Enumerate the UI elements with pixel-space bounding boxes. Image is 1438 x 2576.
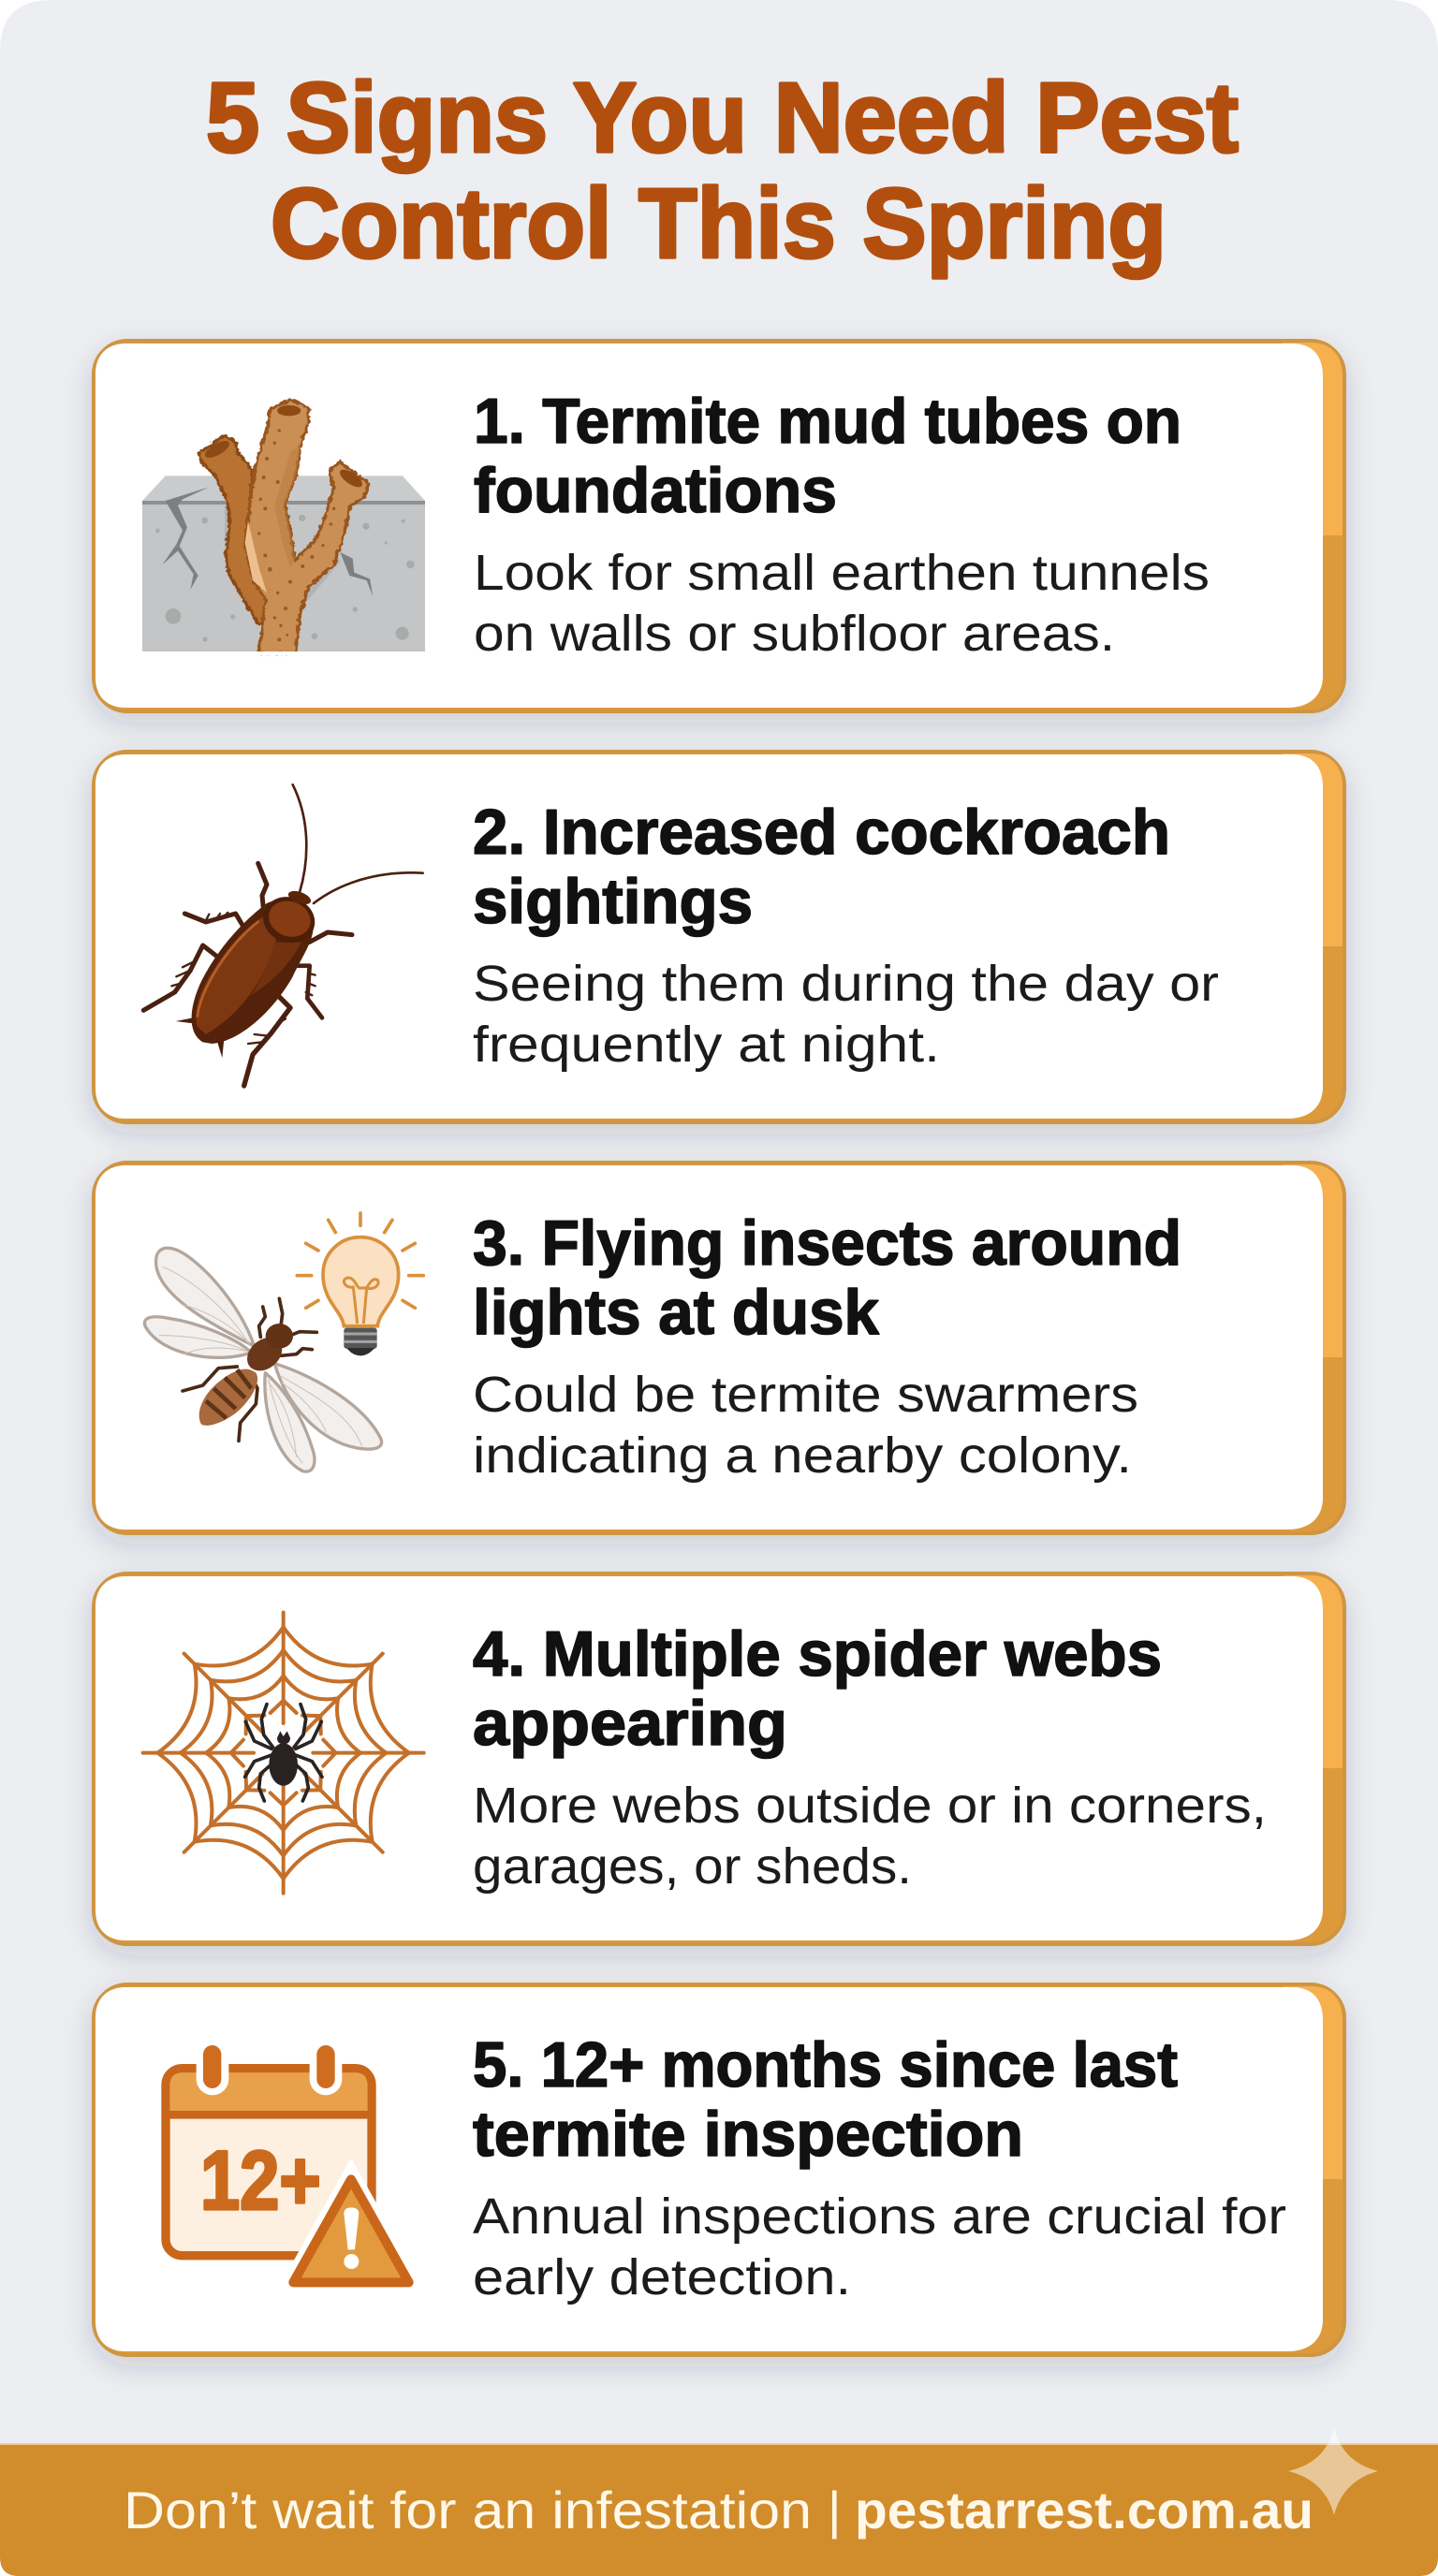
panel: sign 5 twelve months since inspection xyxy=(94,1984,1344,2355)
description: Look for small earthen tunnels xyxy=(474,545,1210,601)
footer text: pestarrest.com.au xyxy=(855,2481,1313,2539)
footer text: | xyxy=(828,2481,842,2539)
description: Could be termite swarmers xyxy=(473,1367,1138,1423)
icon: calendar with warning triangle xyxy=(166,2041,426,2296)
heading line 2: foundations xyxy=(474,455,837,526)
icon: spider web with spider xyxy=(121,1590,446,1915)
description line 2: frequently at night. xyxy=(473,1017,940,1073)
icon: sparkle xyxy=(1288,2427,1378,2515)
icon: calendar with warning triangle: 12+ xyxy=(200,2133,321,2227)
description: Annual inspections are crucial for xyxy=(473,2188,1286,2245)
footer banner xyxy=(0,2444,1438,2576)
title: Control This Spring xyxy=(271,168,1167,279)
description: Seeing them during the day or xyxy=(473,956,1219,1012)
heading line 2: lights at dusk xyxy=(473,1277,879,1348)
heading line 2: sightings xyxy=(473,866,753,937)
description: More webs outside or in corners, xyxy=(473,1778,1267,1834)
icon: flying termite and light bulb xyxy=(144,1213,423,1471)
description line 2: indicating a nearby colony. xyxy=(473,1427,1132,1484)
description line 2: early detection. xyxy=(473,2249,851,2305)
heading line 2: termite inspection xyxy=(473,2099,1023,2170)
icon: termite mud tubes on cracked concrete xyxy=(142,400,425,656)
panel: sign 2 cockroach sightings xyxy=(94,752,1344,1122)
footer text: Don’t wait for an infestation xyxy=(124,2481,812,2539)
heading line 2: appearing xyxy=(473,1688,787,1759)
icon: cockroach xyxy=(143,784,423,1086)
title xyxy=(206,63,1239,279)
panel: sign 4 multiple spider webs xyxy=(94,1573,1344,1944)
heading: 1. Termite mud tubes on xyxy=(474,386,1181,457)
heading: 3. Flying insects around xyxy=(473,1208,1181,1279)
description line 2: garages, or sheds. xyxy=(473,1838,912,1895)
panel: sign 1 termite mud tubes xyxy=(94,341,1344,711)
description line 2: on walls or subfloor areas. xyxy=(474,606,1115,662)
heading: 4. Multiple spider webs xyxy=(473,1618,1162,1690)
title: 5 Signs You Need Pest xyxy=(206,63,1239,173)
panel: sign 3 flying insects around lights xyxy=(94,1163,1344,1533)
heading: 2. Increased cockroach xyxy=(473,797,1170,868)
heading: 5. 12+ months since last xyxy=(473,2029,1178,2100)
footer text xyxy=(124,2481,1313,2539)
